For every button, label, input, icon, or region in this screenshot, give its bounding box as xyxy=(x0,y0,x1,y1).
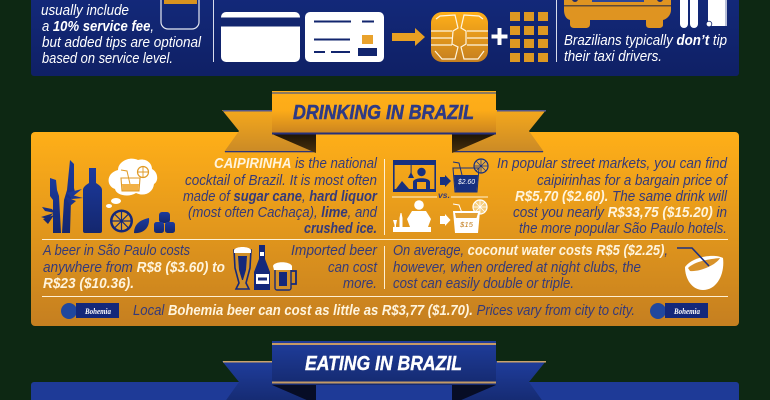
icon: taxi receipts xyxy=(680,0,727,28)
imported beer text xyxy=(291,242,378,292)
imported beer text: Imported beer xyxy=(291,242,378,259)
coconut water text: On average, coconut water costs R$5 ($2.25), xyxy=(393,242,668,259)
ribbon: eating in Brazil xyxy=(222,341,546,400)
caipirinha ingredient icons xyxy=(41,159,175,233)
logo: Bohemia right xyxy=(650,303,708,319)
caipirinha text xyxy=(183,155,378,237)
street market price text: R$5,70 ($2.60). The same drink will xyxy=(515,188,728,205)
beer cost text: R$23 ($10.36). xyxy=(43,275,134,292)
panel: eating in Brazil xyxy=(31,382,739,400)
heading: eating in Brazil: EATING IN BRAZIL xyxy=(305,353,462,375)
icon: sugar cane xyxy=(41,160,83,233)
caipirinha text: (most often Cachaça), lime, and xyxy=(188,204,378,221)
taxi tipping text: Brazilians typically don’t tip xyxy=(564,32,727,49)
street market price text xyxy=(497,155,729,237)
icon: crushed ice xyxy=(154,212,175,233)
icon: liquor bottle xyxy=(83,168,102,233)
street market price text: cost you nearly R$33,75 ($15.20) in xyxy=(513,204,727,221)
street market price text: caipirinhas for a bargain price of xyxy=(537,172,729,189)
icon: taxi xyxy=(564,0,671,28)
vs label: vs. xyxy=(438,190,450,200)
icon: street caipirinha $2.60: $2.60 xyxy=(457,179,475,186)
icon: coconut with straw xyxy=(677,248,723,290)
plus sign xyxy=(492,28,508,45)
tipping service fee text: but added tips are optional xyxy=(42,34,202,51)
caipirinha text: made of sugar cane, hard liquor xyxy=(183,188,378,205)
street market versus hotel icons xyxy=(392,159,488,233)
arrow: card to chip xyxy=(392,28,425,46)
beer cost text: anywhere from R$8 ($3.60) to xyxy=(43,259,225,276)
icon: hotel bartender xyxy=(393,200,431,232)
street market price text: In popular street markets, you can find xyxy=(497,155,728,172)
imported beer text: can cost xyxy=(328,259,378,276)
icon: beer bottle xyxy=(254,245,270,290)
ribbon: drinking in Brazil xyxy=(222,91,546,153)
beer cost text: A beer in São Paulo costs xyxy=(42,242,190,259)
logo: Bohemia left: Bohemia xyxy=(84,306,112,316)
icon: hotel caipirinha $15: $15 xyxy=(459,220,474,229)
icon: PIN keypad xyxy=(510,12,548,62)
logo: Bohemia right: Bohemia xyxy=(673,306,701,316)
panel: tipping xyxy=(31,0,739,76)
caipirinha text: CAIPIRINHA is the national xyxy=(214,155,378,172)
coconut water text: however, when ordered at night clubs, the xyxy=(393,259,641,276)
heading: drinking in Brazil: DRINKING IN BRAZIL xyxy=(293,102,474,124)
icon: lime slice xyxy=(110,210,133,232)
icon: chip xyxy=(431,12,488,62)
panel: drinking in Brazil xyxy=(31,132,739,326)
caipirinha text: crushed ice. xyxy=(304,220,377,237)
arrow: to hotel price xyxy=(440,214,450,226)
tipping service fee text: a 10% service fee, xyxy=(42,18,154,35)
icon: thought cloud with cocktail xyxy=(106,159,157,208)
Bohemia beer price text: Local Bohemia beer can cost as little as R$3,77 ($1.70). Prices vary from city to city. xyxy=(133,302,635,319)
taxi tipping text xyxy=(564,32,727,65)
tipping service fee text: based on service level. xyxy=(42,50,173,67)
icon: beer glass xyxy=(234,247,251,289)
logo: Bohemia left xyxy=(61,303,119,319)
icon: leaf xyxy=(134,218,149,233)
icon: credit card back xyxy=(221,12,300,62)
caipirinha text: cocktail of Brazil. It is most often xyxy=(185,172,377,189)
imported beer text: more. xyxy=(343,275,377,292)
tipping service fee text: usually include xyxy=(41,2,129,19)
coconut water text xyxy=(393,242,668,292)
icon: street market stall xyxy=(393,160,436,192)
icon: beer mug xyxy=(273,262,296,290)
arrow: to street price xyxy=(440,175,451,187)
tipping service fee text xyxy=(41,2,202,67)
street market price text: the more popular São Paulo hotels. xyxy=(519,220,727,237)
beer cost text xyxy=(42,242,225,292)
icon: credit card front xyxy=(305,12,384,62)
beer icons xyxy=(234,245,296,290)
coconut water text: cost can easily double or triple. xyxy=(393,275,574,292)
icon: tips receipt xyxy=(161,0,199,29)
taxi tipping text: their taxi drivers. xyxy=(564,48,662,65)
